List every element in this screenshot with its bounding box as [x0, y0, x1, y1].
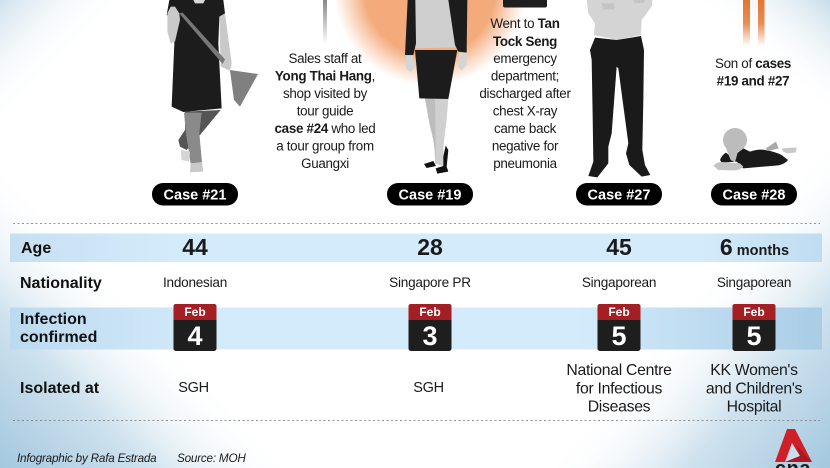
isolated at values: Diseases — [588, 398, 651, 416]
text: case 19 note — [479, 16, 571, 171]
text: case 21 note: Sales staff at — [289, 51, 362, 66]
text: case 19 note: negative for — [492, 138, 559, 154]
pill: case 19 — [387, 183, 473, 206]
nationality values — [163, 275, 791, 290]
calendar: Feb 5 — [732, 304, 776, 351]
calendar: Feb 4 — [174, 304, 216, 351]
figure: case 19 — [405, 0, 467, 174]
pill: case 21: Case #21 — [164, 188, 226, 204]
text: case 19 note: Tock Seng — [493, 34, 557, 49]
calendar: Feb 3 — [408, 304, 452, 351]
nationality values: Singaporean — [717, 275, 791, 290]
connector line: grey — [323, 0, 327, 44]
text: case 21 note — [275, 51, 375, 171]
row labels: confirmed — [20, 329, 97, 346]
calendar: Feb 4: Feb — [184, 305, 206, 319]
text: case 21 note: Yong Thai Hang, — [275, 68, 375, 84]
row band: infection confirmed — [10, 308, 822, 350]
text: case 21 note: tour guide — [297, 104, 353, 118]
figure: case 27 — [587, 0, 652, 177]
credits: Infographic by Rafa Estrada — [17, 452, 157, 465]
nationality values: Singaporean — [582, 275, 656, 290]
isolated at values: SGH — [178, 380, 209, 396]
calendar stub top — [503, 0, 547, 8]
age values: 6 months — [720, 234, 789, 260]
age values: 45 — [606, 234, 632, 260]
pill: case 27 — [576, 183, 662, 206]
isolated at values: SGH — [413, 380, 444, 396]
nationality values: Indonesian — [163, 275, 227, 290]
calendar: Feb 3: 3 — [422, 321, 438, 351]
isolated at values: Hospital — [727, 398, 781, 416]
pill: case 28: Case #28 — [723, 188, 785, 204]
pill: case 27: Case #27 — [588, 188, 650, 204]
calendar: Feb 5: 5 — [611, 321, 627, 351]
isolated at values: for Infectious — [576, 380, 663, 398]
age values: 44 — [182, 234, 208, 260]
pill: case 19: Case #19 — [399, 188, 461, 204]
calendar: Feb 4: 4 — [187, 321, 203, 351]
text: case 28 note — [715, 56, 791, 88]
text: case 19 note: discharged after — [479, 86, 571, 101]
age values — [182, 234, 789, 260]
text: case 28 note: Son of cases — [715, 56, 791, 71]
pill: case 28 — [711, 183, 797, 206]
calendar: Feb 5: 5 — [746, 321, 762, 351]
calendar: Feb 3: Feb — [419, 305, 441, 319]
isolated at values — [178, 362, 803, 416]
calendar: Feb 5 — [598, 304, 640, 351]
text: case 21 note: case #24 who led — [275, 121, 375, 136]
figure: case 28 — [713, 128, 797, 170]
row labels: Age — [21, 240, 51, 257]
credits: Source: MOH — [177, 452, 246, 465]
pill: case 21 — [152, 183, 238, 206]
nationality values: Singapore PR — [389, 275, 471, 290]
isolated at values: and Children's — [706, 380, 803, 398]
text: case 19 note: pneumonia — [493, 156, 558, 171]
isolated at values: KK Women's — [710, 362, 798, 379]
isolated at values: National Centre — [566, 362, 672, 379]
connector lines: orange — [743, 0, 764, 46]
logo: CNA — [775, 429, 812, 468]
row band: age — [10, 234, 822, 262]
text: case 21 note: Guangxi — [301, 156, 349, 171]
text: case 19 note: chest X-ray — [493, 104, 558, 118]
text: case 21 note: a tour group from — [276, 138, 374, 154]
text: case 19 note: department; — [491, 68, 559, 84]
row labels: Nationality — [20, 275, 102, 292]
text: case 19 note: emergency — [493, 51, 557, 66]
credits — [17, 452, 246, 465]
orange glow — [334, 0, 526, 86]
text: case 19 note: Went to Tan — [490, 16, 560, 31]
row labels: Isolated at — [20, 380, 100, 397]
age values: 28 — [417, 234, 443, 260]
calendar: Feb 5: Feb — [743, 305, 765, 319]
text: case 28 note: #19 and #27 — [717, 74, 789, 88]
row labels: Infection — [20, 311, 87, 328]
figure: case 21 — [167, 0, 258, 172]
calendar: Feb 5: Feb — [608, 305, 630, 319]
text: case 19 note: came back — [494, 121, 557, 136]
text: case 21 note: shop visited by — [283, 86, 368, 101]
row labels — [20, 240, 102, 397]
